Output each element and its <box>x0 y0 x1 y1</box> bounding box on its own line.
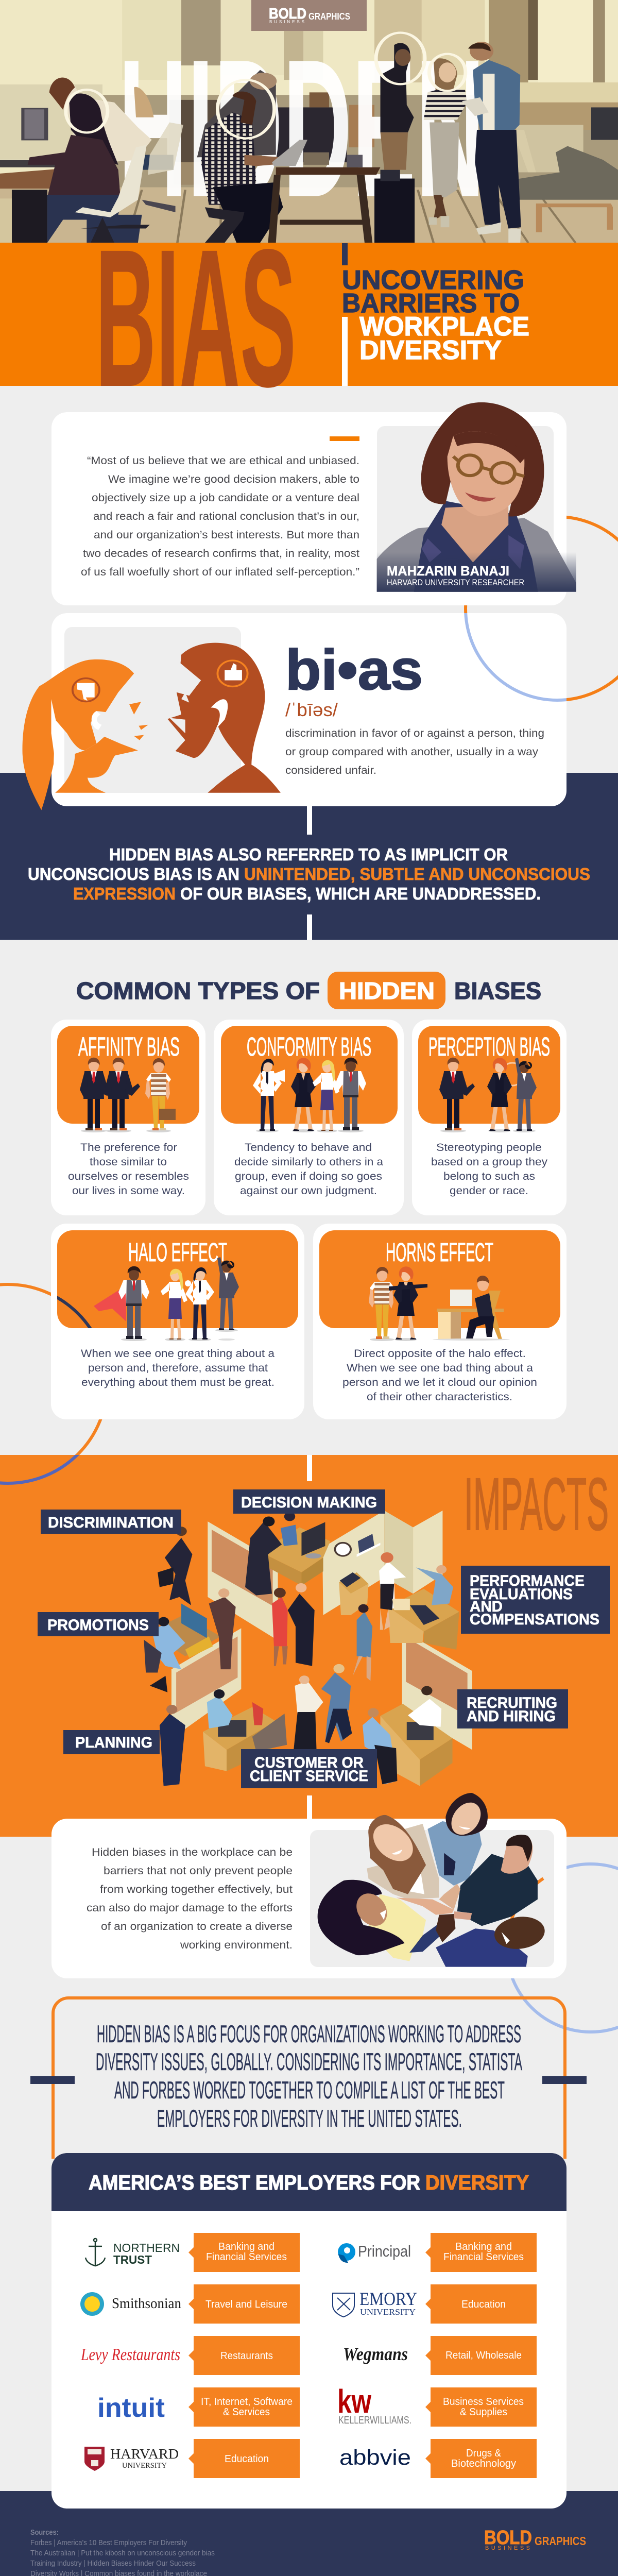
footer logo: BUSINESS <box>485 2545 530 2551</box>
halo title: HALO EFFECT <box>128 1238 227 1267</box>
label: discrimination: DISCRIMINATION <box>48 1514 174 1531</box>
perception text: gender or race. <box>450 1185 528 1197</box>
panel: workplace consequences card <box>52 1793 566 1978</box>
panel: quote card <box>52 402 576 605</box>
heading: common types of hidden biases: COMMON TYPES OF <box>76 977 320 1004</box>
definition: or group compared with another, usually in a way <box>285 746 539 758</box>
right side sofa <box>512 146 618 200</box>
horns illustration <box>369 1266 510 1341</box>
statement text <box>28 845 590 903</box>
word: bi·as: bi•as <box>285 638 423 702</box>
top logo: BOLD <box>269 6 306 22</box>
row: Keller Williams: KELLERWILLIAMS. <box>338 2415 411 2426</box>
employers heading: DIVERSITY <box>425 2172 529 2194</box>
label: decision making <box>233 1489 385 1514</box>
halo text <box>81 1348 274 1388</box>
label: recruiting and hiring: AND HIRING <box>467 1708 556 1725</box>
label: performance evaluations and compensations: COMPENSATIONS <box>470 1611 599 1628</box>
ring segment orange <box>507 1878 543 1937</box>
horns text <box>342 1348 537 1403</box>
label: performance evaluations and compensations <box>461 1566 610 1634</box>
panel: horns effect <box>313 1224 566 1419</box>
connector marks <box>307 1455 312 1819</box>
panel: perception bias <box>412 1020 566 1215</box>
label: customer or client service <box>241 1749 377 1788</box>
left desk with monitor <box>0 168 63 189</box>
floor <box>0 188 618 243</box>
label: performance evaluations and compensations: PERFORMANCE <box>470 1572 585 1589</box>
quote text: and reach a fair and rational conclusion that’s in our, <box>93 511 359 522</box>
label: planning: PLANNING <box>75 1734 152 1751</box>
subtitle: DIVERSITY <box>359 335 502 365</box>
subtitle <box>342 265 529 365</box>
consequences text: of an organization to create a diverse <box>101 1921 293 1933</box>
footer logo <box>484 2527 586 2551</box>
subtitle: WORKPLACE <box>359 312 529 342</box>
statement text: UNINTENDED, SUBTLE AND UNCONSCIOUS <box>244 865 590 884</box>
center connector marks <box>307 806 312 940</box>
perception text: Stereotyping people <box>436 1142 542 1154</box>
conformity text: Tendency to behave and <box>245 1142 372 1154</box>
label: performance evaluations and compensations: AND <box>470 1598 503 1615</box>
horns title: HORNS EFFECT <box>386 1238 493 1267</box>
black column <box>374 179 415 243</box>
person: woman in stripes <box>424 88 467 120</box>
row: Wegmans: Wegmans <box>343 2344 408 2364</box>
decorative left ring <box>0 1284 107 1483</box>
statement text: OF OUR BIASES, WHICH ARE UNADDRESSED. <box>180 884 541 903</box>
label: recruiting and hiring: RECRUITING <box>467 1694 557 1711</box>
panel: halo effect <box>51 1224 304 1419</box>
quote text <box>81 455 359 578</box>
hero photo: office scene <box>0 0 618 243</box>
row: Harvard: HARVARD <box>110 2446 179 2462</box>
definition: discrimination in favor of or against a person, thing <box>285 727 544 739</box>
row: Harvard: Education <box>225 2453 269 2465</box>
portrait caption <box>387 563 524 587</box>
row: Levy Restaurants: Restaurants <box>220 2350 273 2362</box>
label: customer or client service: CLIENT SERVICE <box>250 1768 368 1785</box>
panel: affinity bias <box>51 1020 205 1215</box>
illustration: isometric office <box>144 1511 472 1786</box>
row: Levy Restaurants: Levy Restaurants <box>80 2345 180 2364</box>
row: AbbVie <box>339 2439 537 2478</box>
row: Keller Williams: kw <box>337 2383 371 2420</box>
sources: Training Industry | Hidden Biases Hinder Our Success <box>30 2559 196 2568</box>
top logo <box>251 0 367 31</box>
row: Keller Williams: & Supplies <box>460 2406 507 2418</box>
decorative ring <box>466 517 618 700</box>
heading: common types of hidden biases <box>76 972 541 1009</box>
row: Emory: EMORY <box>359 2289 417 2309</box>
employers header <box>52 2153 566 2211</box>
quote text: “Most of us believe that we are ethical and unbiased. <box>87 455 359 467</box>
top logo: GRAPHICS <box>308 11 350 22</box>
panel: employers list <box>52 2153 566 2509</box>
consequences text: Hidden biases in the workplace can be <box>92 1846 293 1858</box>
statement text: UNCONSCIOUS BIAS IS AN <box>28 865 239 884</box>
definition: considered unfair. <box>285 765 376 776</box>
white chair <box>75 145 147 217</box>
person: seated woman <box>69 93 118 165</box>
text: BIAS <box>95 208 296 428</box>
affinity text <box>68 1142 189 1197</box>
quote accent <box>330 436 359 441</box>
employers heading: AMERICA’S BEST EMPLOYERS FOR <box>89 2172 420 2194</box>
affinity illustration <box>80 1058 176 1132</box>
portrait caption: HARVARD UNIVERSITY RESEARCHER <box>387 578 524 587</box>
perception text: belong to such as <box>443 1171 535 1182</box>
definition <box>285 727 544 776</box>
center desk <box>276 167 381 175</box>
footer logo: GRAPHICS <box>535 2534 586 2548</box>
horns text: person and we let it cloud our opinion <box>342 1377 537 1388</box>
intro text <box>96 2020 522 2132</box>
perception illustration <box>439 1058 537 1132</box>
consequences text: can also do major damage to the efforts <box>87 1902 293 1914</box>
label: discrimination <box>41 1510 181 1534</box>
portrait backdrop <box>377 426 554 592</box>
conformity text: against our own judgment. <box>240 1185 377 1197</box>
sources: Sources: <box>30 2528 59 2537</box>
row: Harvard <box>84 2439 300 2478</box>
quote text: two decades of research confirms that, in reality, most <box>83 548 359 560</box>
panel: impacts band <box>0 1455 618 1837</box>
row: Smithsonian <box>80 2284 300 2324</box>
perception text <box>431 1142 548 1197</box>
row: Emory <box>333 2284 537 2324</box>
label: planning <box>63 1730 160 1754</box>
consequences text: barriers that not only prevent people <box>104 1865 293 1877</box>
label: customer or client service: CUSTOMER OR <box>254 1754 364 1771</box>
panel: conformity bias <box>214 1020 404 1215</box>
shelves <box>169 100 229 162</box>
row: AbbVie: Biotechnology <box>451 2458 516 2469</box>
row: Keller Williams <box>337 2383 537 2427</box>
perception text: based on a group they <box>431 1156 548 1168</box>
halo text: person and, therefore, assume that <box>88 1362 268 1374</box>
ring segment in navy <box>57 1296 92 1328</box>
row: Keller Williams: Business Services <box>443 2396 524 2408</box>
panel: definition card <box>23 613 566 810</box>
subtitle: UNCOVERING <box>342 265 524 295</box>
conformity text: group, even if doing so goes <box>235 1171 382 1182</box>
affinity text: our lives in some way. <box>72 1185 185 1197</box>
quote text: objectively size up a job candidate or a venture deal <box>92 492 359 504</box>
orange title band <box>0 243 618 386</box>
photo backdrop <box>310 1830 554 1967</box>
row: Principal <box>338 2233 537 2272</box>
circular highlights <box>66 32 466 139</box>
ring segment in blue <box>464 613 566 702</box>
halo text: When we see one great thing about a <box>81 1348 274 1360</box>
consequences text <box>87 1846 293 1951</box>
row: AbbVie: Drugs & <box>466 2448 502 2459</box>
sources: Forbes | America's 10 Best Employers For Diversity <box>30 2538 187 2547</box>
row: Northern Trust: Financial Services <box>206 2251 287 2263</box>
person: standing man in black <box>381 43 414 132</box>
side dashes <box>30 2076 587 2084</box>
label: recruiting and hiring <box>457 1689 568 1728</box>
row: Intuit <box>97 2387 300 2427</box>
halo text: everything about them must be great. <box>81 1377 274 1388</box>
affinity title: AFFINITY BIAS <box>78 1032 180 1061</box>
pronunciation: /ˈbīəs/ <box>285 699 338 720</box>
top logo: BUSINESS <box>269 20 304 24</box>
affinity text: those similar to <box>90 1156 167 1168</box>
ring segment on band <box>0 1455 79 1485</box>
heading: common types of hidden biases: BIASES <box>454 977 541 1004</box>
row: Smithsonian: Travel and Leisure <box>205 2299 287 2310</box>
labels: impact areas <box>38 1489 610 1788</box>
row: Intuit: IT, Internet, Software <box>201 2396 293 2408</box>
subtitle: BARRIERS TO <box>342 289 520 318</box>
row: Principal: Financial Services <box>443 2251 524 2263</box>
horns text: When we see one bad thing about a <box>347 1362 533 1374</box>
label: decision making: DECISION MAKING <box>241 1494 377 1511</box>
row: Northern Trust: NORTHERN <box>113 2241 180 2255</box>
affinity text: The preference for <box>80 1142 177 1154</box>
frame <box>53 1998 565 2159</box>
label: promotions: PROMOTIONS <box>47 1617 149 1634</box>
row: Principal: Banking and <box>455 2241 512 2252</box>
portrait: Mahzarin Banaji <box>377 402 576 592</box>
consequences text: from working together effectively, but <box>100 1884 293 1895</box>
person: standing woman in white <box>50 79 152 162</box>
row: Emory: UNIVERSITY <box>360 2307 416 2317</box>
decorative ring: lower right <box>507 1864 618 2032</box>
horns text: Direct opposite of the halo effect. <box>354 1348 526 1360</box>
quote text: of us fall woefully short of our inflated self-perception.” <box>81 566 359 578</box>
icon: two facing profiles <box>22 643 281 810</box>
conformity text <box>234 1142 383 1197</box>
quote text: and our organization’s best interests. But more than <box>94 529 359 541</box>
heading: common types of hidden biases: HIDDEN <box>339 977 435 1004</box>
navy statement band <box>0 773 618 940</box>
row: Principal: Principal <box>358 2242 411 2260</box>
person: man with tablet <box>473 60 520 140</box>
statement text: HIDDEN BIAS ALSO REFERRED TO AS IMPLICIT OR <box>109 845 508 864</box>
row: Emory: Education <box>461 2299 506 2310</box>
row: Levy Restaurants <box>80 2336 300 2375</box>
row: Northern Trust: Banking and <box>218 2241 274 2252</box>
row: Wegmans: Retail, Wholesale <box>445 2350 522 2361</box>
conformity title: CONFORMITY BIAS <box>247 1032 371 1061</box>
row: Harvard: UNIVERSITY <box>122 2462 167 2470</box>
label: promotions <box>38 1612 159 1636</box>
horns text: of their other characteristics. <box>367 1391 512 1403</box>
halo illustration <box>94 1257 239 1341</box>
quote text: We imagine we’re good decision makers, able to <box>108 473 359 485</box>
conformity text: decide similarly to others in a <box>234 1156 383 1168</box>
faces backdrop <box>64 627 241 793</box>
statement text: EXPRESSION <box>73 884 176 903</box>
person: standing man behind <box>197 70 276 157</box>
portrait caption: MAHZARIN BANAJI <box>387 563 509 579</box>
sources <box>30 2528 254 2576</box>
consequences text: working environment. <box>180 1939 293 1951</box>
row: Wegmans <box>343 2336 537 2375</box>
footer band <box>0 2491 618 2576</box>
row: Intuit: & Services <box>223 2406 270 2418</box>
sources: The Australian | Put the kibosh on unconscious gender bias <box>30 2549 215 2557</box>
title divider marks <box>342 243 348 386</box>
photo: diverse team stacking hands <box>318 1793 552 1967</box>
panel: best employers framed box <box>30 1998 587 2159</box>
row: Northern Trust: TRUST <box>113 2253 152 2266</box>
footer logo: BOLD <box>484 2527 532 2549</box>
row: Northern Trust <box>85 2233 300 2272</box>
row: AbbVie: abbvie <box>339 2445 411 2469</box>
row: Smithsonian: Smithsonian <box>112 2296 181 2312</box>
label: performance evaluations and compensations: EVALUATIONS <box>470 1586 573 1603</box>
row: Intuit: intuit <box>97 2393 165 2423</box>
conformity illustration <box>253 1058 366 1132</box>
person: seated man in plaid <box>201 112 256 205</box>
affinity text: ourselves or resembles <box>68 1171 189 1182</box>
